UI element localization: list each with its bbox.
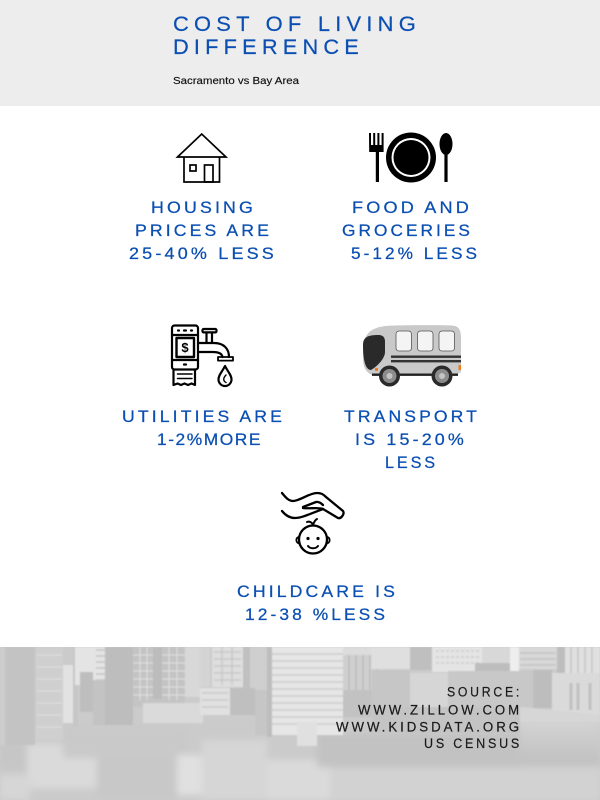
title: DIFFERENCE bbox=[173, 36, 364, 59]
icon: bus bbox=[363, 325, 461, 386]
title: COST OF LIVING bbox=[173, 13, 421, 36]
housing text: HOUSING bbox=[151, 198, 256, 217]
icon: plate and cutlery bbox=[369, 132, 452, 182]
food text: FOOD AND bbox=[352, 198, 472, 217]
childcare text: 12-38 %LESS bbox=[245, 605, 388, 624]
transport text: LESS bbox=[385, 453, 438, 472]
food text bbox=[342, 198, 480, 263]
transport text: IS 15-20% bbox=[355, 430, 467, 449]
transport text bbox=[344, 407, 480, 472]
transport text: TRANSPORT bbox=[344, 407, 480, 426]
utilities text bbox=[122, 407, 285, 449]
footer panel: city photo bbox=[0, 647, 600, 800]
utilities text: UTILITIES ARE bbox=[122, 407, 285, 426]
header panel bbox=[0, 0, 600, 106]
food text: 5-12% LESS bbox=[351, 244, 480, 263]
icon: house bbox=[178, 134, 226, 182]
housing text: 25-40% LESS bbox=[129, 244, 277, 263]
childcare text bbox=[237, 582, 398, 624]
icon: utilities phone and tap bbox=[172, 326, 233, 386]
footer sources text bbox=[336, 684, 522, 751]
footer sources text: WWW.ZILLOW.COM bbox=[358, 702, 522, 718]
childcare text: CHILDCARE IS bbox=[237, 582, 398, 601]
food text: GROCERIES bbox=[342, 221, 473, 240]
utilities text: 1-2%MORE bbox=[157, 430, 262, 449]
footer sources text: WWW.KIDSDATA.ORG bbox=[336, 720, 522, 734]
footer sources text: US CENSUS bbox=[424, 736, 522, 751]
housing text bbox=[129, 198, 277, 263]
icon: hand over baby bbox=[282, 493, 344, 554]
footer sources text: SOURCE: bbox=[447, 684, 522, 700]
title bbox=[173, 13, 421, 59]
subtitle: Sacramento vs Bay Area bbox=[173, 76, 300, 87]
housing text: PRICES ARE bbox=[135, 221, 272, 240]
icon: utilities phone and tap: $ bbox=[181, 340, 189, 355]
